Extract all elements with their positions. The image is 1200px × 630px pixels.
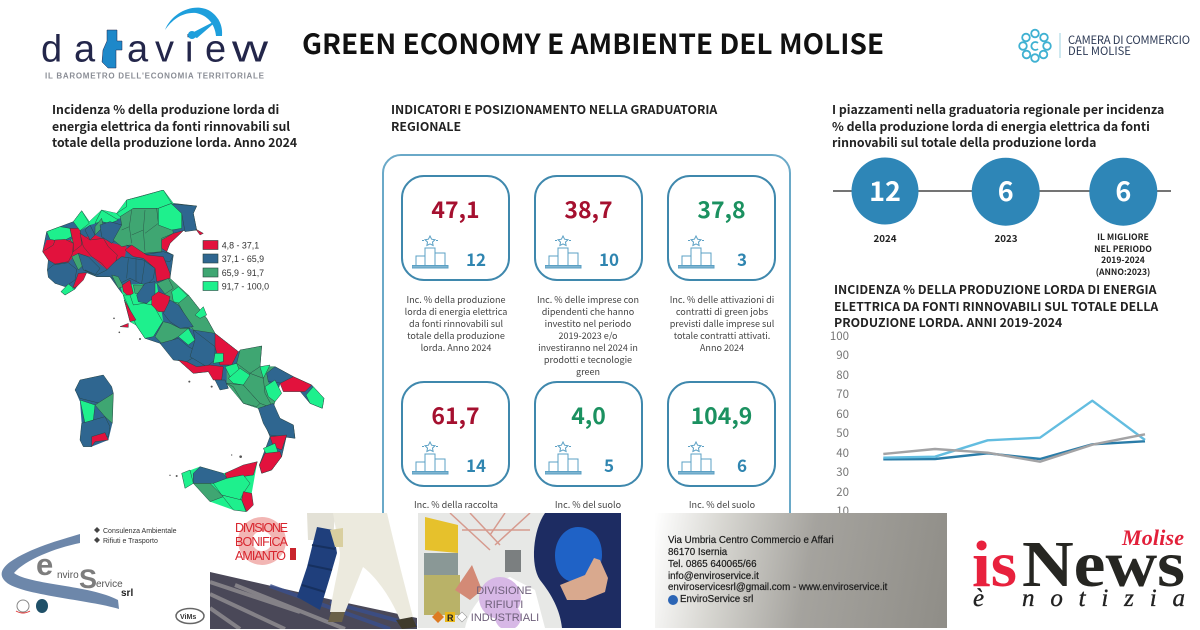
card: green jobs [667,175,776,281]
description: produzione lorda: da fonti rinnovabili sul [409,317,503,330]
description: imprese green [537,293,639,378]
heading: map: energia elettrica da fonti rinnovabili sul [52,117,290,135]
heading: indicators: REGIONALE [391,117,461,135]
logo: dataview: a [74,28,96,70]
description: suolo: Inc. % del suolo [555,498,621,511]
sponsor strip background [0,513,1200,630]
chart: y axis labels: 50 [836,425,849,441]
sponsor: enviro service logo [2,527,205,624]
sponsor: contact card: EnviroService srl [680,594,753,605]
description: suolo consumato: Inc. % del suolo [689,498,755,511]
sponsor: asbestos division photo [210,513,417,629]
sponsor: industrial waste photo: R [447,613,454,623]
sponsor: contact card: 86170 Isernia [668,547,727,558]
sponsor: isnews logo: News [1022,528,1185,601]
heading: map: Incidenza % della produzione lorda di [52,100,279,118]
sponsor: asbestos division photo: AMIANTO [235,549,286,563]
sponsor: enviro service logo: Consulenza Ambientale [103,528,177,535]
chart: y axis labels: 30 [836,464,849,480]
chart: y axis labels: 20 [836,484,849,500]
sponsor: isnews logo: Molise [1121,525,1184,550]
card: raccolta [401,381,510,487]
description: imprese green: investito nel periodo [545,317,631,330]
card: suolo 4,0: 5 [604,452,614,477]
sponsor: industrial waste photo: INDUSTRIALI [471,612,539,624]
chart: y axis labels: 70 [836,386,849,402]
heading: indicators: INDICATORI E POSIZIONAMENTO NELLA GRADUATORIA [391,100,717,118]
card: imprese green: 38,7 [564,191,613,225]
sponsor: contact card [655,513,947,628]
sponsor: industrial waste photo: RIFIUTI [485,599,523,611]
description: imprese green: Inc. % delle imprese con [537,293,639,306]
description: green jobs [670,293,774,354]
heading: rankings [832,100,1164,151]
chart: y axis labels: 40 [836,445,849,461]
logo: dataview: v [155,28,174,70]
sponsor: asbestos division photo: BONIFICA [235,535,289,549]
heading: rankings: rinnovabili sul totale della produzione lorda [832,133,1096,151]
label: best of period: IL MIGLIORE [1097,231,1149,243]
chart: y axis labels: 10 [836,503,849,519]
label: 2024: 2024 [873,231,897,245]
description: green jobs: totale contratti attivati. [674,329,770,342]
sponsor: enviro service logo: Rifiuti e Trasporto [103,538,158,545]
card: imprese green [534,175,643,281]
timeline: ranking circles [833,158,1171,226]
map legend [202,240,269,291]
chart: y axis labels: 100 [830,328,849,344]
label: best of period: 2019-2024 [1101,254,1145,266]
description: imprese green: prodotti e tecnologie [544,353,632,366]
card: green jobs: 3 [737,246,747,271]
label: 2023: 2023 [994,231,1018,245]
chart: three regional lines [883,400,1146,463]
heading: line chart: INCIDENZA % DELLA PRODUZIONE LORDA DI ENERGIA [834,280,1156,298]
timeline: ranking circles: 6 [998,170,1014,209]
description: green jobs: Inc. % delle attivazioni di [670,293,774,306]
label: best of period [1094,231,1152,278]
choropleth map of Italy [42,190,324,512]
title: GREEN ECONOMY E AMBIENTE DEL MOLISE [302,23,884,63]
sponsor: asbestos division photo: DIVISIONE [235,521,288,535]
chart: y axis labels [830,328,849,519]
logo: dataview: e [205,28,226,70]
timeline: ranking circles: 12 [869,170,901,209]
label: best of period: NEL PERIODO [1094,243,1152,255]
heading: line chart: ELETTRICA DA FONTI RINNOVABILI SUL TOTALE DELLA [834,297,1158,315]
description: produzione lorda: lorda. Anno 2024 [421,341,491,354]
timeline: ranking circles: 6 [1115,170,1131,209]
chart: y axis labels: 60 [836,406,849,422]
card: imprese green: 10 [599,246,619,271]
logo: dataview: d [41,28,62,70]
panel: indicators [382,154,791,574]
chart: y axis labels: 80 [836,367,849,383]
heading: map: totale della produzione lorda. Anno 2024 [52,133,297,151]
description: produzione lorda: Inc. % della produzione [407,293,505,306]
sponsor: enviro service logo: ervice [96,579,123,590]
logo: dataview: w [231,28,269,70]
description: raccolta: Inc. % della raccolta [414,498,498,511]
description: imprese green: investiranno nel 2024 in [538,341,638,354]
heading: rankings: % della produzione lorda di energia elettrica da fonti [832,117,1150,135]
heading: rankings: I piazzamenti nella graduatoria regionale per incidenza [832,100,1164,118]
map legend: 4,8 - 37,1 [222,240,259,250]
heading: indicators [391,100,718,135]
card: produzione lorda: 12 [466,246,486,271]
sponsor: industrial waste photo: DIVISIONE [476,585,532,597]
sponsor: contact card: Via Umbria Centro Commercio e Affari [668,535,834,546]
card: suolo 104,9: 6 [737,452,747,477]
description: imprese green: 2019-2023 e/o [558,329,618,342]
description: produzione lorda [405,293,507,354]
heading: line chart [834,280,1158,331]
chart: y axis labels: 90 [836,347,849,363]
logo: dataview [41,8,269,80]
sponsor: enviro service logo: srl [121,588,133,599]
description: produzione lorda: lorda di energia elettrica [405,305,507,318]
description: imprese green: green [576,365,600,378]
logo: camera di commercio: DEL MOLISE [1068,43,1131,59]
logo: camera di commercio: CAMERA DI COMMERCIO [1068,32,1190,48]
heading: line chart: PRODUZIONE LORDA. ANNI 2019-2024 [834,313,1062,331]
card: produzione lorda: 47,1 [431,191,480,225]
sponsor: enviro service logo: ViMs [180,614,196,621]
card: raccolta: 61,7 [431,397,480,431]
label: best of period: (ANNO:2023) [1096,266,1150,278]
description: green jobs: contratti di green jobs [676,305,768,318]
logo: dataview: i [185,28,193,70]
description: imprese green: dipendenti che hanno [542,305,634,318]
card: suolo 104,9 [667,381,776,487]
sponsor: contact card: info@enviroservice.it [668,571,759,582]
sponsor: enviro service logo: nviro [57,570,79,581]
sponsor: enviro service logo: e [36,547,53,582]
sponsor: contact card: enviroservicesrl@gmail.com - www.enviroservice.it [668,582,887,593]
logo: camera di commercio [1018,28,1190,63]
description: produzione lorda: totale della produzione [407,329,505,342]
card: produzione lorda [401,175,510,281]
logo: dataview: a [127,28,149,70]
description: green jobs: Anno 2024 [700,341,744,354]
map legend: 65,9 - 91,7 [222,268,264,278]
card: suolo 4,0 [534,381,643,487]
sponsor: isnews logo: è notizia [973,585,1185,612]
sponsor: isnews logo: is [972,528,1017,601]
card: suolo 104,9: 104,9 [691,397,752,431]
heading: map [52,100,297,151]
logo: dataview: IL BAROMETRO DELL'ECONOMIA TERRITORIALE [45,72,265,80]
sponsor: isnews logo [972,525,1185,612]
description: green jobs: previsti dalle imprese sul [670,317,774,330]
sponsor: industrial waste photo [418,513,621,628]
card: green jobs: 37,8 [697,191,746,225]
card: suolo 4,0: 4,0 [571,397,606,431]
sponsor: contact card: Tel. 0865 640065/66 [668,559,757,570]
map legend: 91,7 - 100,0 [222,281,269,291]
card: raccolta: 14 [466,452,486,477]
map legend: 37,1 - 65,9 [222,254,264,264]
sponsor: enviro service logo: S [79,564,97,594]
